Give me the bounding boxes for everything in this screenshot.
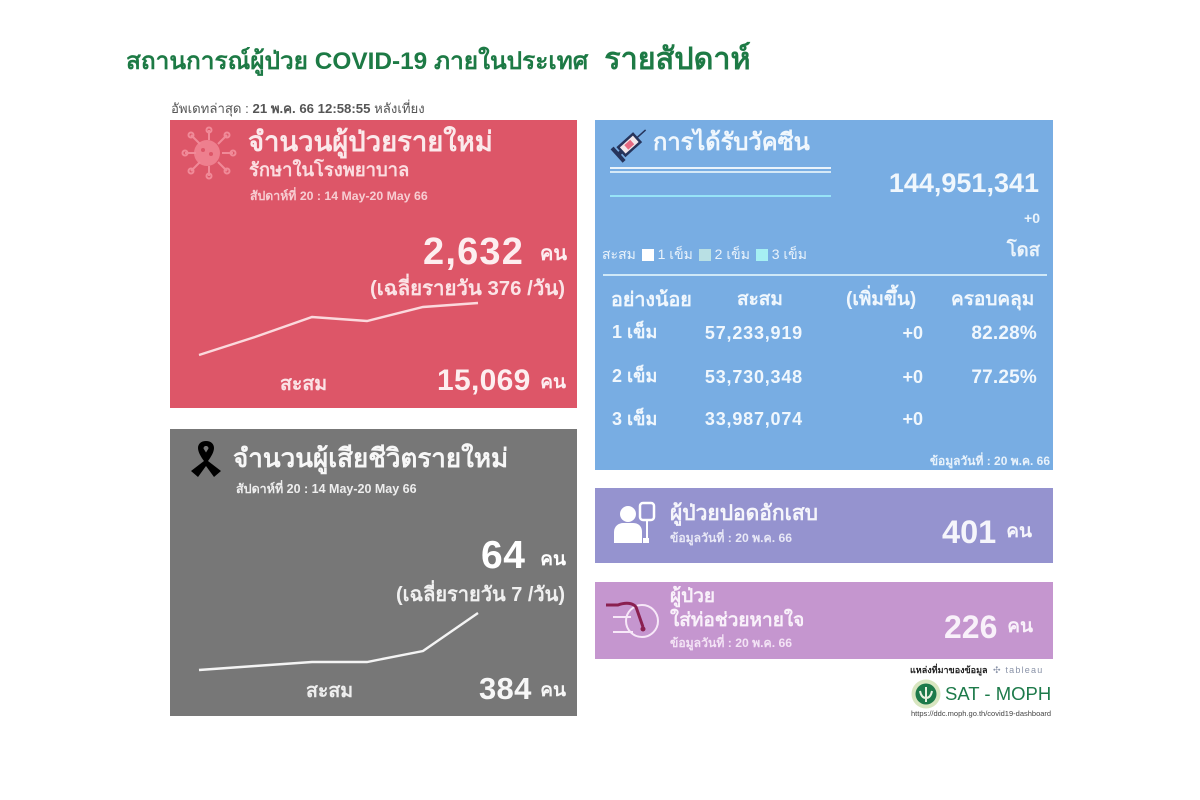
subheading: รักษาในโรงพยาบาล: [249, 159, 409, 180]
heading: จำนวนผู้ป่วยรายใหม่: [248, 126, 493, 157]
total delta: +0: [1024, 210, 1040, 226]
cumulative value: 15,069: [437, 364, 531, 397]
value: 401: [942, 514, 996, 550]
panel: new deaths: [170, 429, 577, 716]
value: 226: [944, 609, 997, 645]
table: doses: 82.28%: [971, 323, 1037, 344]
icon: patient with IV: [614, 502, 656, 543]
legend: สะสม 1 เข็ม 2 เข็ม 3 เข็ม: [602, 246, 807, 262]
data date: ข้อมูลวันที่ : 20 พ.ค. 66: [930, 454, 1050, 468]
weekly total unit: คน: [540, 243, 567, 265]
cumulative label: สะสม: [280, 373, 327, 395]
icon: ministry logo: [912, 680, 940, 708]
cumulative unit: คน: [540, 372, 566, 393]
cumulative unit: คน: [540, 680, 566, 701]
table: doses: 3 เข็ม: [612, 409, 657, 429]
unit: คน: [1007, 616, 1033, 637]
line chart: new deaths: [198, 612, 479, 672]
table: doses: สะสม: [737, 289, 783, 310]
cumulative label: สะสม: [306, 680, 353, 702]
table: doses: +0: [902, 367, 923, 387]
table: doses: 57,233,919: [705, 323, 803, 343]
update timestamp: อัพเดทล่าสุด : 21 พ.ค. 66 12:58:55 หลังเที่ยง: [171, 101, 425, 116]
weekly total: 64: [481, 534, 525, 577]
logo text: SAT - MOPH: [945, 683, 1051, 704]
unit: คน: [1006, 521, 1032, 542]
cumulative value: 384: [479, 671, 532, 706]
icon: breathing tube: [606, 602, 659, 638]
data date: ข้อมูลวันที่ : 20 พ.ค. 66: [670, 636, 792, 650]
table: doses: 77.25%: [971, 367, 1037, 388]
weekly total unit: คน: [540, 549, 566, 570]
table: doses: 53,730,348: [705, 367, 803, 387]
table: doses: ครอบคลุม: [951, 289, 1034, 310]
heading: ผู้ป่วยปอดอักเสบ: [670, 502, 818, 525]
weekly total: 2,632: [423, 231, 524, 273]
panel: ventilator patients: [595, 582, 1053, 659]
table: doses: +0: [902, 409, 923, 429]
icon: black ribbon: [191, 441, 221, 477]
daily average: (เฉลี่ยรายวัน 7 /วัน): [396, 584, 565, 606]
unit: doses: โดส: [1007, 239, 1040, 260]
panel: pneumonia patients: [595, 488, 1053, 563]
table: doses: 2 เข็ม: [612, 366, 657, 386]
source url: https://ddc.moph.go.th/covid19-dashboard: [911, 709, 1051, 718]
week range: สัปดาห์ที่ 20 : 14 May-20 May 66: [236, 482, 417, 496]
daily average: (เฉลี่ยรายวัน 376 /วัน): [370, 278, 565, 300]
heading: การได้รับวัคซีน: [653, 130, 810, 156]
heading: ใส่ท่อช่วยหายใจ: [670, 610, 804, 631]
source credit: [910, 664, 1051, 718]
icon: virus: [182, 126, 236, 180]
total doses: 144,951,341: [889, 168, 1039, 198]
icon: syringe: [610, 129, 646, 163]
table: doses: [611, 284, 1037, 429]
panel: vaccination: [595, 120, 1053, 470]
table: doses: 1 เข็ม: [612, 322, 657, 342]
line chart: new cases: [198, 302, 478, 356]
divider: [603, 274, 1047, 276]
week range: สัปดาห์ที่ 20 : 14 May-20 May 66: [250, 189, 428, 203]
title: สถานการณ์ผู้ป่วย COVID-19 ภายในประเทศ รายสัปดาห์: [126, 42, 751, 76]
progress bars: [610, 167, 831, 197]
source label: แหล่งที่มาของข้อมูล ✣ tableau: [910, 665, 1043, 675]
table: doses: (เพิ่มขึ้น): [846, 289, 916, 310]
heading: จำนวนผู้เสียชีวิตรายใหม่: [233, 443, 508, 473]
table: doses: อย่างน้อย: [611, 289, 692, 311]
heading: ผู้ป่วย: [670, 586, 715, 607]
panel: new hospitalised cases: [170, 120, 577, 408]
data date: ข้อมูลวันที่ : 20 พ.ค. 66: [670, 531, 792, 545]
table: doses: +0: [902, 323, 923, 343]
heading: [670, 586, 804, 631]
table: doses: 33,987,074: [705, 409, 803, 429]
